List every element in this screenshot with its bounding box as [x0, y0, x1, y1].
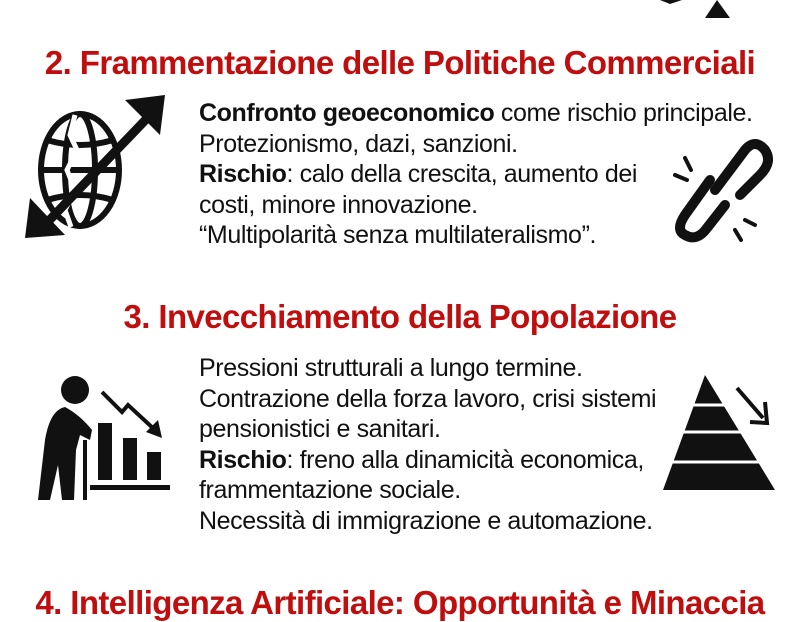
text block: section 3: Contrazione della forza lavoro, crisi sistemi	[199, 384, 656, 412]
icon: broken chain	[672, 139, 774, 242]
heading: section 3: 3. Invecchiamento della Popolazione	[124, 298, 676, 335]
heading: section 4 (cut off): 4. Intelligenza Artificiale: Opportunità e Minaccia	[35, 584, 765, 621]
text block: section 2	[199, 99, 753, 249]
icon: top partial pyramid	[660, 0, 730, 18]
heading: section 2: 2. Frammentazione delle Politiche Commerciali	[45, 44, 755, 81]
text block: section 2: Rischio: calo della crescita, aumento dei	[199, 160, 637, 188]
text block: section 2: “Multipolarità senza multilateralismo”.	[199, 221, 596, 249]
text block: section 3: frammentazione sociale.	[199, 476, 461, 504]
text block: section 3	[199, 354, 656, 534]
icon: elderly person with declining chart	[38, 376, 170, 500]
text block: section 2: costi, minore innovazione.	[199, 190, 478, 218]
icon: broken globe with arrows	[25, 95, 165, 238]
text block: section 2: Confronto geoeconomico come rischio principale.	[199, 99, 753, 127]
text block: section 3: pensionistici e sanitari.	[199, 415, 441, 443]
text block: section 3: Necessità di immigrazione e automazione.	[199, 506, 653, 534]
text block: section 2: Protezionismo, dazi, sanzioni.	[199, 130, 518, 158]
icon: pyramid with down arrow	[663, 375, 775, 490]
text block: section 3: Rischio: freno alla dinamicità economica,	[199, 446, 644, 474]
text block: section 3: Pressioni strutturali a lungo termine.	[199, 354, 583, 382]
